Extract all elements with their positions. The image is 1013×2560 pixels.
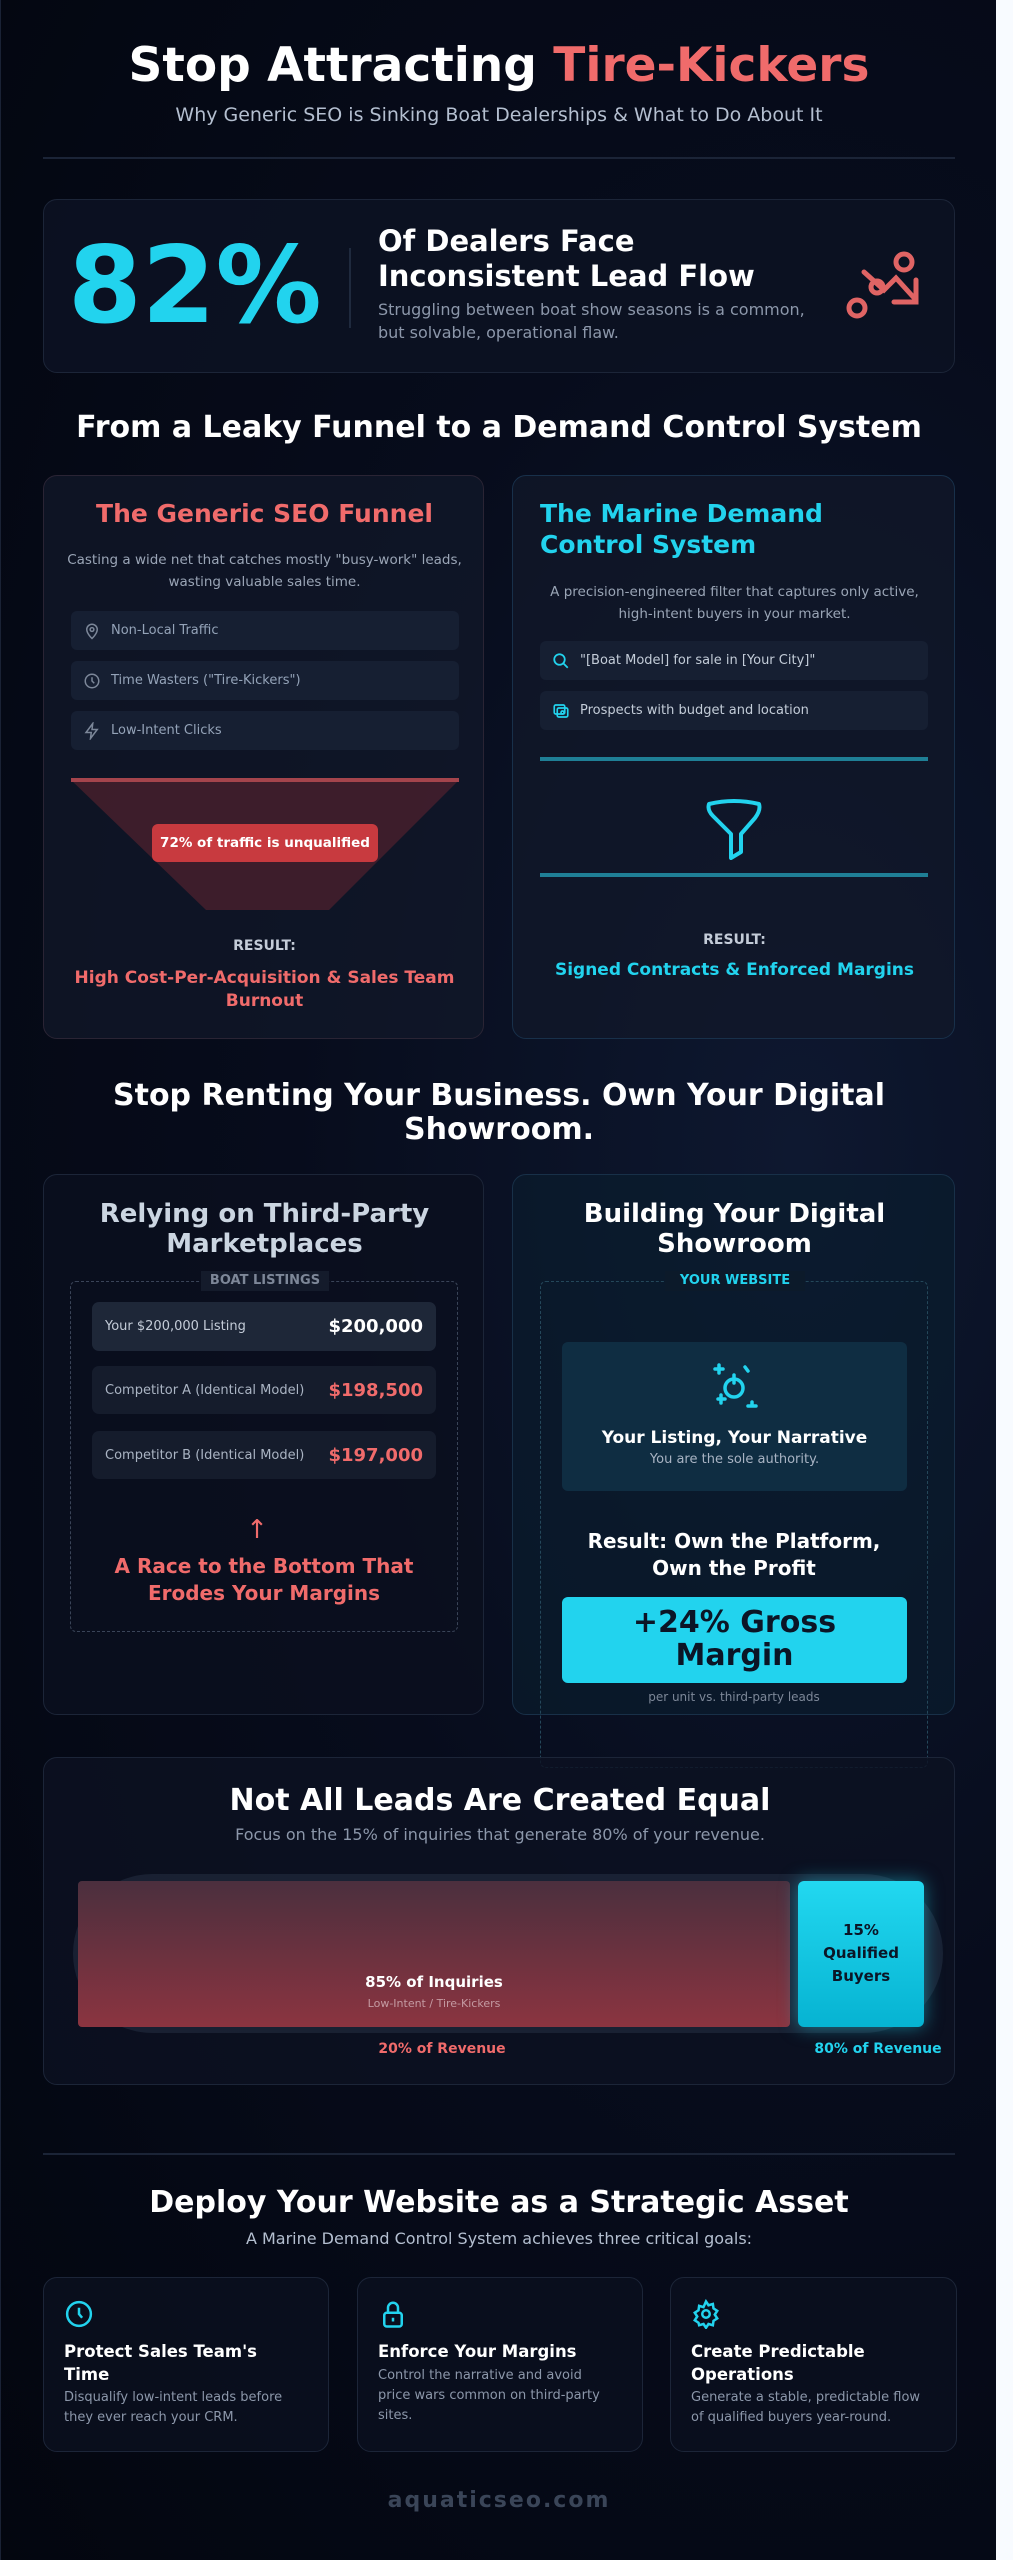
- funnel graphic: [71, 778, 459, 910]
- label: 20% revenue: 20% of Revenue: [378, 2041, 506, 2057]
- card title: [64, 2342, 257, 2384]
- panel description: A precision-engineered filter that captures only active,: [550, 584, 919, 600]
- item: low-intent clicks: [71, 711, 459, 750]
- stat description: [378, 300, 805, 342]
- icon: lock: [383, 2302, 403, 2328]
- card text: sites.: [378, 2408, 412, 2423]
- race to bottom text: Erodes Your Margins: [148, 1581, 380, 1605]
- title: Stop Attracting Tire-Kickers: [129, 38, 869, 93]
- item: time wasters: [71, 661, 459, 700]
- panel: generic SEO funnel: [43, 475, 484, 1039]
- listing row: yours: $200,000: [328, 1316, 423, 1337]
- panel description: Casting a wide net that catches mostly "busy-work" leads,: [67, 552, 462, 568]
- section heading: showroom: [113, 1078, 885, 1147]
- card text: Generate a stable, predictable flow: [691, 2390, 920, 2405]
- panel: third-party marketplaces: [43, 1174, 484, 1715]
- result text: High Cost-Per-Acquisition & Sales Team: [75, 968, 454, 988]
- race to bottom text: A Race to the Bottom That: [115, 1554, 413, 1578]
- card text: [691, 2390, 920, 2425]
- result: own the platform: Own the Profit: [652, 1556, 816, 1580]
- item: search query: "[Boat Model] for sale in [Your City]": [580, 653, 815, 668]
- card text: price wars common on third-party: [378, 2388, 600, 2403]
- card: predictable operations: [670, 2277, 957, 2452]
- callout: +24% gross margin: Margin: [675, 1638, 794, 1673]
- bar: 85% inquiries: 85% of Inquiries: [365, 1973, 503, 1991]
- card text: of qualified buyers year-round.: [691, 2410, 891, 2425]
- card title: Operations: [691, 2365, 794, 2384]
- listing row: competitor B: Competitor B (Identical Model): [105, 1448, 304, 1462]
- listing row: competitor B: $197,000: [328, 1444, 423, 1466]
- result text: Signed Contracts & Enforced Margins: [555, 960, 914, 980]
- panel title: The Generic SEO Funnel: [96, 499, 433, 528]
- listing row: competitor A: [92, 1366, 436, 1414]
- stat heading: Inconsistent Lead Flow: [378, 259, 755, 293]
- item: prospects: Prospects with budget and location: [580, 703, 809, 718]
- bar: 15% qualified: [798, 1881, 924, 2027]
- card title: Create Predictable: [691, 2342, 865, 2361]
- panel title: Showroom: [657, 1229, 812, 1259]
- section heading: funnel: From a Leaky Funnel to a Demand Control System: [76, 410, 922, 445]
- footer brand: aquaticseo.com: [388, 2488, 610, 2513]
- bar: 15% qualified: Buyers: [832, 1967, 890, 1985]
- bar: 15% qualified: 15%: [843, 1921, 879, 1939]
- callout: +24% gross margin: [562, 1597, 907, 1683]
- label: boat listings: [201, 1271, 329, 1291]
- stat heading: Of Dealers Face: [378, 224, 634, 258]
- label: boat listings: BOAT LISTINGS: [210, 1273, 320, 1288]
- card: your listing narrative: [562, 1342, 907, 1491]
- bar chart: [73, 1869, 943, 2039]
- panel title: Not All Leads Are Created Equal: [230, 1783, 770, 1818]
- panel description: wasting valuable sales time.: [168, 574, 361, 590]
- card: enforce margins: [357, 2277, 643, 2452]
- icon: gear: [693, 2299, 719, 2329]
- listing row: yours: [92, 1302, 436, 1351]
- item: non-local traffic: [71, 611, 459, 650]
- panel: not all leads: [43, 1757, 955, 2085]
- card title: Protect Sales Team's: [64, 2342, 257, 2361]
- icon: declining trend: [846, 252, 918, 318]
- bar: 85% inquiries: Low-Intent / Tire-Kickers: [368, 1997, 500, 2010]
- item: search query: [540, 641, 928, 680]
- panel: marine demand control system: [512, 475, 955, 1039]
- result text: [75, 968, 454, 1011]
- bar: 85% inquiries: [78, 1881, 790, 2027]
- result: own the platform: [588, 1529, 880, 1580]
- card text: Control the narrative and avoid: [378, 2368, 582, 2383]
- callout: +24% gross margin: +24% Gross: [633, 1605, 836, 1640]
- label: 80% revenue: 80% of Revenue: [814, 2041, 942, 2057]
- bar: 15% qualified: Qualified: [823, 1944, 899, 1962]
- item: prospects: [540, 691, 928, 730]
- card title: Your Listing, Your Narrative: [602, 1428, 867, 1448]
- stat description: but solvable, operational flaw.: [378, 323, 619, 342]
- panel: stat card: [43, 199, 955, 373]
- result label: RESULT:: [233, 938, 296, 954]
- section subtitle: A Marine Demand Control System achieves three critical goals:: [246, 2229, 752, 2248]
- icon: sparkle target: [713, 1363, 758, 1408]
- panel title: The Marine Demand: [540, 499, 823, 528]
- card sub: You are the sole authority.: [650, 1452, 819, 1467]
- listing row: competitor A: $198,500: [328, 1380, 423, 1400]
- listings box: [70, 1281, 458, 1632]
- result: own the platform: Result: Own the Platform,: [588, 1529, 880, 1553]
- listing row: competitor A: Competitor A (Identical Model): [105, 1382, 304, 1398]
- panel title: Relying on Third-Party: [100, 1199, 429, 1229]
- badge: 72% unqualified: 72% of traffic is unqualified: [160, 835, 370, 851]
- footnote: per unit vs. third-party leads: [648, 1690, 820, 1704]
- panel title: Marketplaces: [166, 1229, 363, 1259]
- section heading: strategic asset: Deploy Your Website as a Strategic Asset: [149, 2185, 849, 2220]
- panel subtitle: Focus on the 15% of inquiries that generate 80% of your revenue.: [235, 1825, 765, 1844]
- panel: digital showroom: [512, 1174, 955, 1715]
- panel title: [540, 499, 823, 559]
- icon: arrow up: ↑: [246, 1515, 268, 1545]
- panel title: [584, 1199, 885, 1259]
- card text: [378, 2368, 600, 2423]
- panel description: [67, 552, 462, 590]
- card title: Enforce Your Margins: [378, 2342, 577, 2361]
- race to bottom text: [114, 1554, 413, 1605]
- result label: RESULT:: [703, 932, 766, 948]
- listing row: yours: Your $200,000 Listing: [105, 1319, 246, 1334]
- stat heading: [378, 224, 755, 293]
- label: your website: YOUR WEBSITE: [680, 1273, 790, 1288]
- card: protect time: [43, 2277, 329, 2452]
- subtitle: Why Generic SEO is Sinking Boat Dealerships & What to Do About It: [175, 104, 823, 126]
- panel description: high-intent buyers in your market.: [618, 606, 851, 622]
- icon: clock: [66, 2300, 92, 2328]
- item: time wasters: Time Wasters ("Tire-Kickers"): [111, 673, 301, 688]
- label: your website: [665, 1271, 805, 1291]
- card title: [691, 2342, 865, 2384]
- card title: Time: [64, 2365, 109, 2384]
- stat description: Struggling between boat show seasons is a common,: [378, 300, 805, 319]
- item: low-intent clicks: Low-Intent Clicks: [111, 723, 222, 738]
- icon: filter funnel: [706, 799, 762, 860]
- panel title: [100, 1199, 429, 1259]
- section heading: showroom: Stop Renting Your Business. Own Your Digital: [113, 1078, 885, 1113]
- panel description: [550, 584, 919, 622]
- big stat 82%: 82%: [68, 224, 322, 347]
- item: non-local traffic: Non-Local Traffic: [111, 623, 218, 638]
- panel title: Building Your Digital: [584, 1199, 885, 1229]
- section heading: showroom: Showroom.: [404, 1112, 594, 1147]
- website box: [540, 1281, 928, 1768]
- panel title: Control System: [540, 530, 756, 559]
- badge: 72% unqualified: [152, 824, 378, 862]
- result text: Burnout: [226, 991, 303, 1011]
- card text: Disqualify low-intent leads before they ever reach your CRM.: [64, 2390, 282, 2425]
- listing row: competitor B: [92, 1431, 436, 1479]
